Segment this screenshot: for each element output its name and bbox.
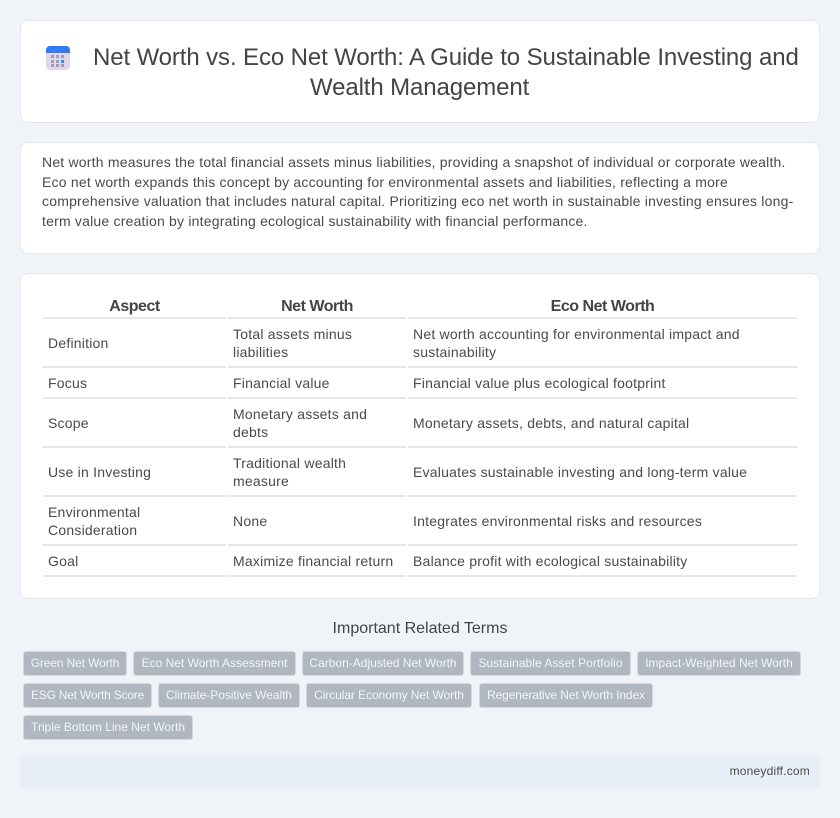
related terms tags	[23, 651, 801, 740]
row: use in investing: Evaluates sustainable investing and long-term value	[413, 464, 747, 480]
tag: Circular Economy Net Worth	[314, 688, 464, 702]
row: scope: Monetary assets and	[233, 406, 367, 422]
table header: Aspect	[109, 298, 160, 315]
row: definition: Total assets minus	[233, 326, 352, 342]
row: use in investing: Use in Investing	[48, 464, 151, 480]
tag: Eco Net Worth Assessment	[142, 656, 287, 670]
panel: summary paragraph	[20, 142, 820, 254]
row: goal: Balance profit with ecological sustainability	[413, 553, 687, 569]
row: focus: Focus	[48, 375, 87, 391]
row: environmental consideration: Consideration	[48, 522, 137, 538]
row: use in investing: Traditional wealth	[233, 455, 346, 471]
footer	[20, 754, 820, 788]
tag: Climate-Positive Wealth	[166, 688, 292, 702]
row: focus	[48, 375, 666, 391]
title	[93, 44, 799, 100]
row: use in investing: measure	[233, 473, 289, 489]
tag: Impact-Weighted Net Worth	[645, 656, 793, 670]
tag	[479, 683, 653, 708]
row: use in investing	[48, 455, 747, 489]
row: focus: Financial value plus ecological footprint	[413, 375, 666, 391]
row: environmental consideration: Integrates environmental risks and resources	[413, 513, 702, 529]
row: goal: Maximize financial return	[233, 553, 393, 569]
tag	[302, 651, 464, 676]
row: environmental consideration: Environmental	[48, 504, 140, 520]
row: scope: Monetary assets, debts, and natural capital	[413, 415, 689, 431]
tag: Regenerative Net Worth Index	[487, 688, 645, 702]
tag	[470, 651, 631, 676]
tag: Sustainable Asset Portfolio	[478, 656, 623, 670]
related terms heading: Important Related Terms	[333, 620, 507, 637]
comparison table	[43, 298, 797, 577]
table header	[109, 298, 654, 315]
row: environmental consideration	[48, 504, 702, 538]
row: scope	[48, 406, 689, 440]
row: goal: Goal	[48, 553, 78, 569]
row: focus: Financial value	[233, 375, 330, 391]
row: goal	[48, 553, 688, 569]
row: definition: sustainability	[413, 344, 496, 360]
table header: Net Worth	[281, 298, 353, 315]
summary text	[42, 154, 793, 229]
panel: header	[20, 20, 820, 123]
summary text: term value creation by integrating ecological sustainability with financial performance.	[42, 213, 588, 229]
tag: Green Net Worth	[31, 656, 119, 670]
tag	[23, 683, 152, 708]
tag	[23, 715, 193, 740]
title: Net Worth vs. Eco Net Worth: A Guide to Sustainable Investing and	[93, 44, 799, 71]
row: definition: Definition	[48, 335, 109, 351]
tag	[158, 683, 300, 708]
summary text: Eco net worth expands this concept by accounting for environmental assets and liabilities, reflecting a more	[42, 174, 728, 190]
tag	[23, 651, 127, 676]
summary text: comprehensive valuation that includes natural capital. Prioritizing eco net worth in sustainable investing ensures long-	[42, 193, 793, 209]
summary text: Net worth measures the total financial assets minus liabilities, providing a snapshot of individual or corporate wealth.	[42, 154, 786, 170]
row: environmental consideration: None	[233, 513, 267, 529]
tag: ESG Net Worth Score	[31, 688, 144, 702]
tag: Triple Bottom Line Net Worth	[31, 720, 185, 734]
tag	[133, 651, 296, 676]
row: scope: Scope	[48, 415, 89, 431]
row: definition: Net worth accounting for environmental impact and	[413, 326, 740, 342]
row: scope: debts	[233, 424, 268, 440]
panel: comparison table	[20, 273, 820, 599]
tag: Carbon-Adjusted Net Worth	[309, 656, 457, 670]
row: definition	[48, 326, 740, 360]
table header: Eco Net Worth	[551, 298, 654, 315]
footer source text: moneydiff.com	[730, 764, 810, 778]
tag	[306, 683, 472, 708]
icon: calendar	[46, 46, 70, 70]
title: Wealth Management	[310, 74, 529, 100]
row: definition: liabilities	[233, 344, 288, 360]
tag	[637, 651, 801, 676]
